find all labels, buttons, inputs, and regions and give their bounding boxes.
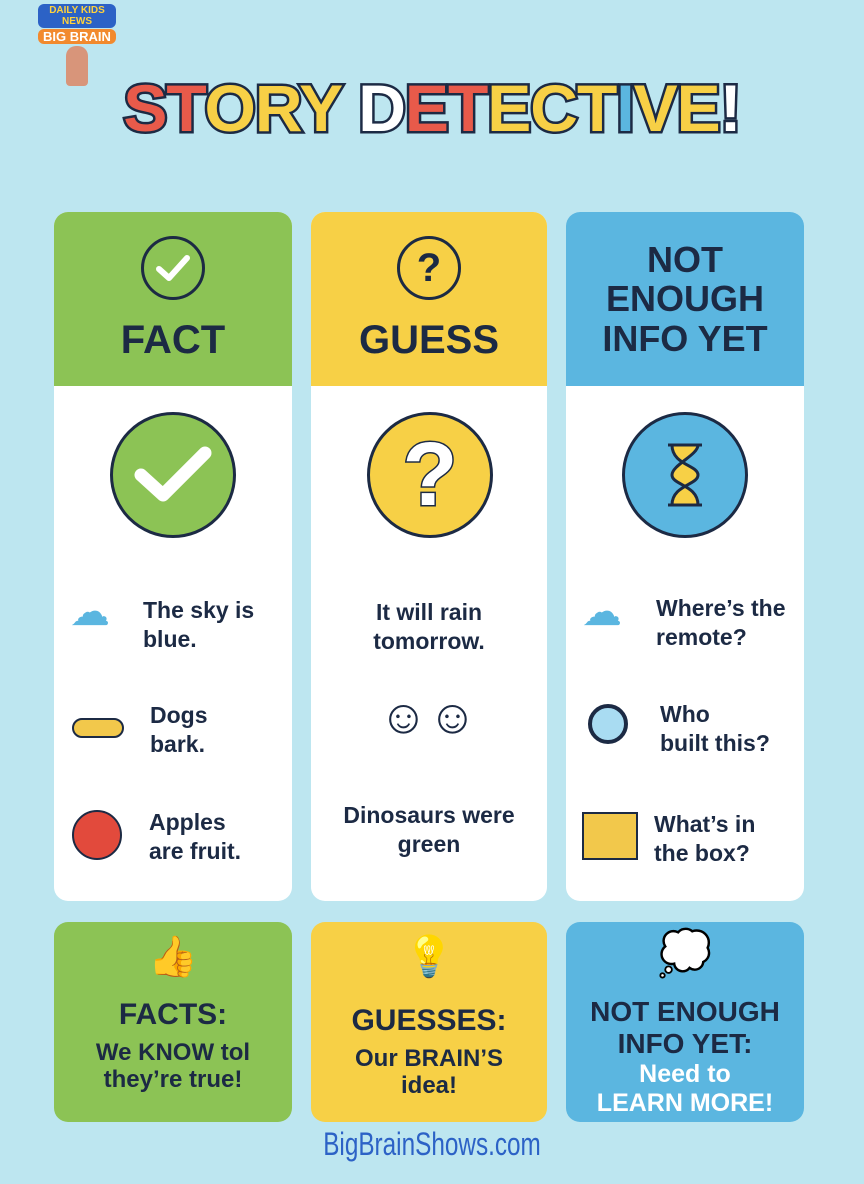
footer: learn more: LEARN MORE! — [597, 1089, 773, 1117]
item: who built: Who — [660, 701, 710, 727]
item: who built — [660, 701, 770, 756]
item: box: the box? — [654, 840, 750, 866]
item: dinosaurs — [343, 802, 515, 857]
item: dinosaurs: Dinosaurs were — [343, 802, 515, 828]
footer: facts: We KNOW tol — [96, 1038, 250, 1066]
icon: hourglass circle — [622, 412, 748, 538]
panel: not enough info — [566, 212, 804, 901]
footer: facts: they’re true! — [104, 1066, 242, 1093]
icon: rain cloud: ☁ — [70, 590, 110, 634]
header: guess: ? — [417, 246, 441, 290]
item: apples: Apples — [149, 809, 226, 835]
item: dogs: Dogs — [150, 702, 208, 728]
footer: guesses: idea! — [401, 1072, 457, 1099]
header: not enough info: INFO YET — [602, 318, 768, 359]
icon: apple — [72, 810, 122, 860]
item: box: What’s in — [654, 811, 755, 837]
footer: learn more: NOT ENOUGH — [590, 996, 780, 1027]
item: sky: blue. — [143, 626, 197, 652]
item: rain: tomorrow. — [373, 628, 485, 654]
header: fact — [54, 212, 292, 386]
footer: facts: FACTS: — [119, 998, 227, 1031]
icon: check circle — [110, 412, 236, 538]
panel: guess — [311, 212, 547, 901]
icon: question circle — [367, 412, 493, 538]
header: guess — [311, 212, 547, 386]
item: dogs — [150, 702, 208, 757]
item: rain: It will rain — [376, 599, 482, 625]
footer: learn more: 💭 — [658, 929, 712, 978]
footer: learn more: Need to — [639, 1060, 731, 1088]
logo: BIG BRAIN — [43, 29, 111, 44]
icon: two kids: ☺☺ — [379, 691, 477, 744]
panel: fact — [54, 212, 292, 901]
footer: guesses: 💡 — [404, 935, 454, 979]
item: apples — [149, 809, 241, 864]
logo — [38, 4, 116, 86]
footer: facts: 👍 — [148, 935, 198, 979]
header: not enough info — [566, 212, 804, 386]
item: remote — [656, 595, 786, 650]
header: not enough info: ENOUGH — [606, 278, 764, 319]
icon: box — [582, 812, 638, 860]
footer: guesses: GUESSES: — [351, 1004, 507, 1037]
item: remote: Where’s the — [656, 595, 786, 621]
item: dogs: bark. — [150, 731, 205, 757]
item: dinosaurs: green — [398, 831, 460, 857]
item: apples: are fruit. — [149, 838, 241, 864]
item: sky — [143, 597, 254, 652]
footer: learn more — [566, 922, 804, 1122]
item: rain — [373, 599, 485, 654]
item: remote: remote? — [656, 624, 747, 650]
logo: DAILY KIDS — [49, 5, 105, 16]
logo: NEWS — [62, 16, 92, 27]
item: box — [654, 811, 755, 866]
icon: cloud: ☁ — [582, 590, 622, 634]
icon: magnifier — [588, 704, 628, 744]
footer: facts — [54, 922, 292, 1122]
footer: guesses — [311, 922, 547, 1122]
footer url: BigBrainShows.com — [323, 1126, 541, 1162]
footer: learn more: INFO YET: — [618, 1028, 752, 1059]
item: sky: The sky is — [143, 597, 254, 623]
item: who built: built this? — [660, 730, 770, 756]
icon: question circle: ? — [402, 424, 457, 524]
title: STORY DETECTIVE! — [123, 71, 741, 145]
header: not enough info: NOT — [647, 239, 723, 280]
footer: guesses: Our BRAIN’S — [355, 1044, 503, 1072]
header: guess: GUESS — [359, 318, 499, 362]
header: fact: FACT — [121, 318, 225, 362]
icon: bone — [72, 718, 124, 738]
